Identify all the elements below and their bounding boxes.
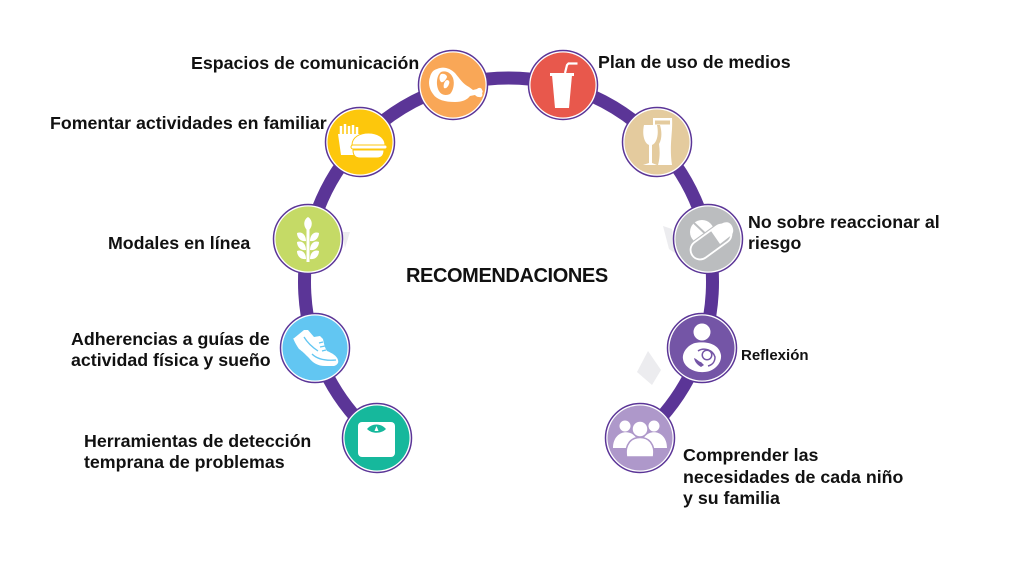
label: Espacios de comunicación: Espacios de comunicación — [191, 53, 419, 73]
label: No sobre reaccionar al riesgo: No sobre reaccionar al — [748, 212, 940, 232]
label: No sobre reaccionar al riesgo: riesgo — [748, 233, 801, 253]
icon: wine and beer glasses — [622, 108, 692, 176]
icon: drink cup — [528, 50, 598, 120]
label: Plan de uso de medios: Plan de uso de medios — [598, 52, 791, 72]
icon: reflection, mother and baby — [668, 314, 736, 382]
label: Modales en línea: Modales en línea — [108, 233, 250, 253]
label: No sobre reaccionar al riesgo — [748, 212, 940, 253]
icon: pills — [674, 204, 742, 274]
title: RECOMENDACIONES — [406, 265, 608, 287]
label: Adherencias a guías de actividad física y sueño — [71, 329, 271, 370]
label: Adherencias a guías de actividad física y sueño: Adherencias a guías de — [71, 329, 270, 349]
label: Comprender las necesidades de cada niño y su familia: Comprender las — [683, 445, 818, 465]
label: Reflexión: Reflexión — [741, 347, 809, 364]
label: Adherencias a guías de actividad física y sueño: actividad física y sueño — [71, 350, 271, 370]
icon: fries and burger — [326, 108, 394, 176]
icon: scale — [342, 404, 412, 472]
label: Fomentar actividades en familiar: Fomentar actividades en familiar — [50, 113, 327, 133]
label: Comprender las necesidades de cada niño y su familia: necesidades de cada niño — [683, 466, 903, 486]
label: Herramientas de detección temprana de problemas — [84, 431, 311, 472]
icon: wheat — [274, 204, 342, 274]
label: Comprender las necesidades de cada niño y su familia — [683, 445, 903, 508]
icon: family group — [606, 404, 674, 472]
label: Herramientas de detección temprana de problemas: temprana de problemas — [84, 452, 285, 472]
faint artifacts — [342, 226, 675, 385]
purple arc connector — [305, 78, 713, 438]
label: Herramientas de detección temprana de problemas: Herramientas de detección — [84, 431, 311, 451]
icon: ham — [418, 50, 488, 120]
icon: running shoe — [280, 314, 350, 382]
label: Comprender las necesidades de cada niño y su familia: y su familia — [683, 488, 780, 508]
